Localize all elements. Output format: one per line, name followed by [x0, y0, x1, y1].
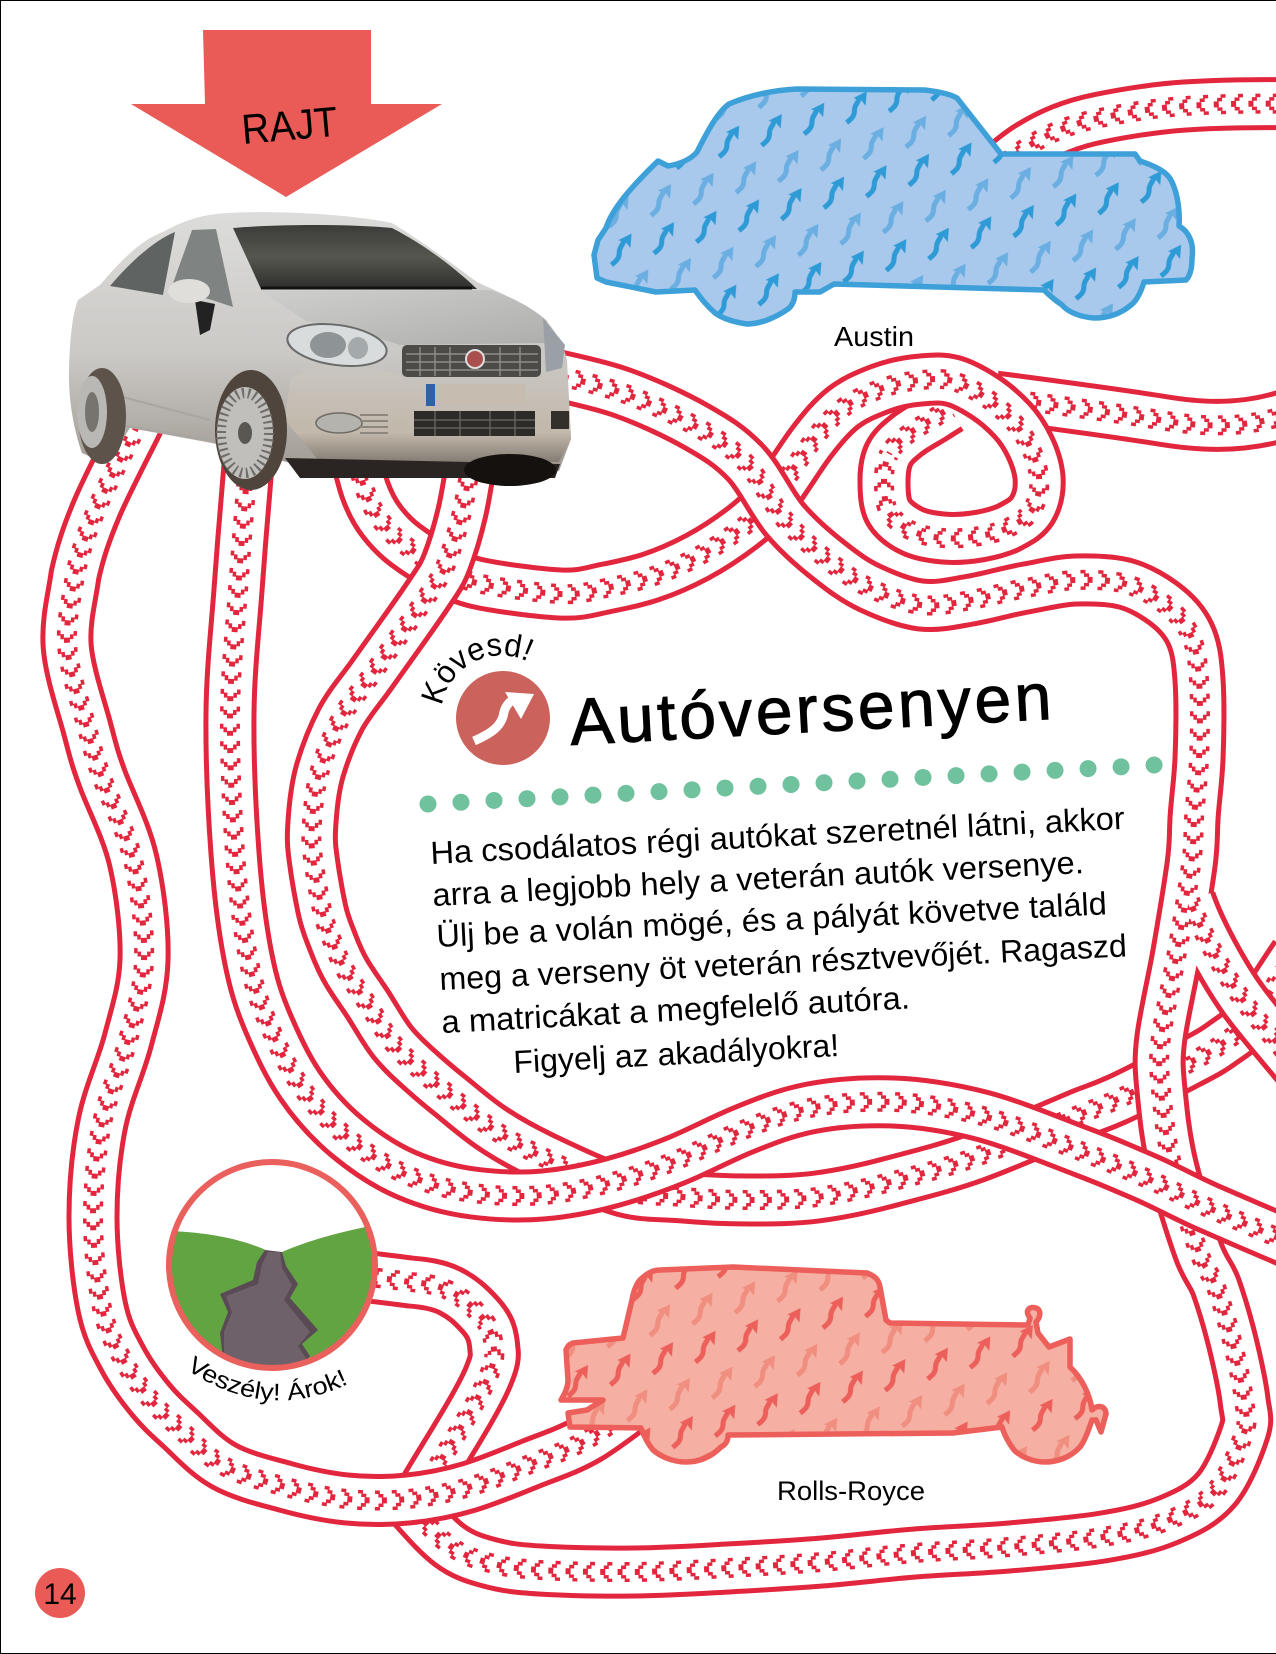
Austin label: Austin — [834, 321, 914, 352]
Rolls-Royce silhouette — [561, 1267, 1106, 1462]
wing mirror — [195, 300, 215, 335]
race track: S-curve road from car to right edge — [311, 462, 1276, 1200]
page number badge — [35, 1568, 85, 1618]
door lines — [115, 395, 212, 440]
ditch — [220, 1250, 318, 1360]
race track: road to the ditch — [370, 1277, 494, 1495]
front bumper — [285, 364, 571, 462]
car body — [69, 212, 571, 471]
grille — [402, 345, 541, 377]
intro text block: meg a verseny öt veterán résztvevőjét. Ragaszd — [439, 927, 1128, 997]
intro text block: Figyelj az akadályokra! — [512, 1027, 840, 1080]
bonnet — [261, 290, 547, 345]
race track: spiral tail — [884, 408, 950, 481]
dotted divider — [428, 765, 1155, 804]
side windows — [110, 232, 175, 295]
page number badge: 14 — [43, 1578, 77, 1611]
hazard label: Veszély! Árok! — [192, 1355, 346, 1404]
photo: silver car — [69, 212, 571, 490]
lower grille — [414, 411, 535, 436]
intro text block: arra a legjobb hely a veterán autók versenye. — [432, 844, 1085, 913]
intro text block: Ha csodálatos régi autókat szeretnél látni, akkor — [430, 800, 1126, 871]
windshield — [233, 225, 477, 289]
green hills — [172, 1227, 372, 1358]
intro text block: Ülj be a volán mögé, és a pályát követve találd — [436, 885, 1108, 954]
race track: long road around the text with right branch — [405, 372, 1276, 1572]
start arrow — [131, 30, 442, 197]
Austin pattern and outline — [594, 89, 1192, 324]
right headlight — [543, 318, 565, 372]
fog light — [316, 413, 362, 433]
race track: left road to Rolls-Royce — [67, 420, 650, 1500]
icon: white squiggle arrow — [474, 692, 534, 741]
headlight — [285, 318, 389, 372]
race track: road from car into loop — [352, 379, 1039, 594]
heading badge — [456, 671, 550, 765]
race track: road leaving the loop to the right — [995, 397, 1276, 425]
Austin silhouette — [594, 89, 1192, 324]
rear wheel — [78, 368, 126, 464]
title: Autóversenyen — [568, 659, 1053, 759]
underbody shadow — [285, 458, 560, 478]
number plate — [426, 384, 526, 404]
curved label: Kövesd!: Kövesd! — [421, 634, 534, 704]
race track: top road behind Austin — [985, 104, 1276, 180]
start label: RAJT — [240, 98, 339, 153]
front wheel — [215, 370, 287, 490]
race track: road from front wheel across the page — [230, 465, 1276, 1245]
Rolls-Royce pattern and outline — [561, 1267, 1106, 1462]
hazard: ditch circle — [165, 1162, 380, 1380]
intro text block — [430, 800, 1128, 1080]
intro text block: a matricákat a megfelelő autóra. — [440, 979, 911, 1040]
Rolls-Royce label: Rolls-Royce — [777, 1476, 925, 1506]
